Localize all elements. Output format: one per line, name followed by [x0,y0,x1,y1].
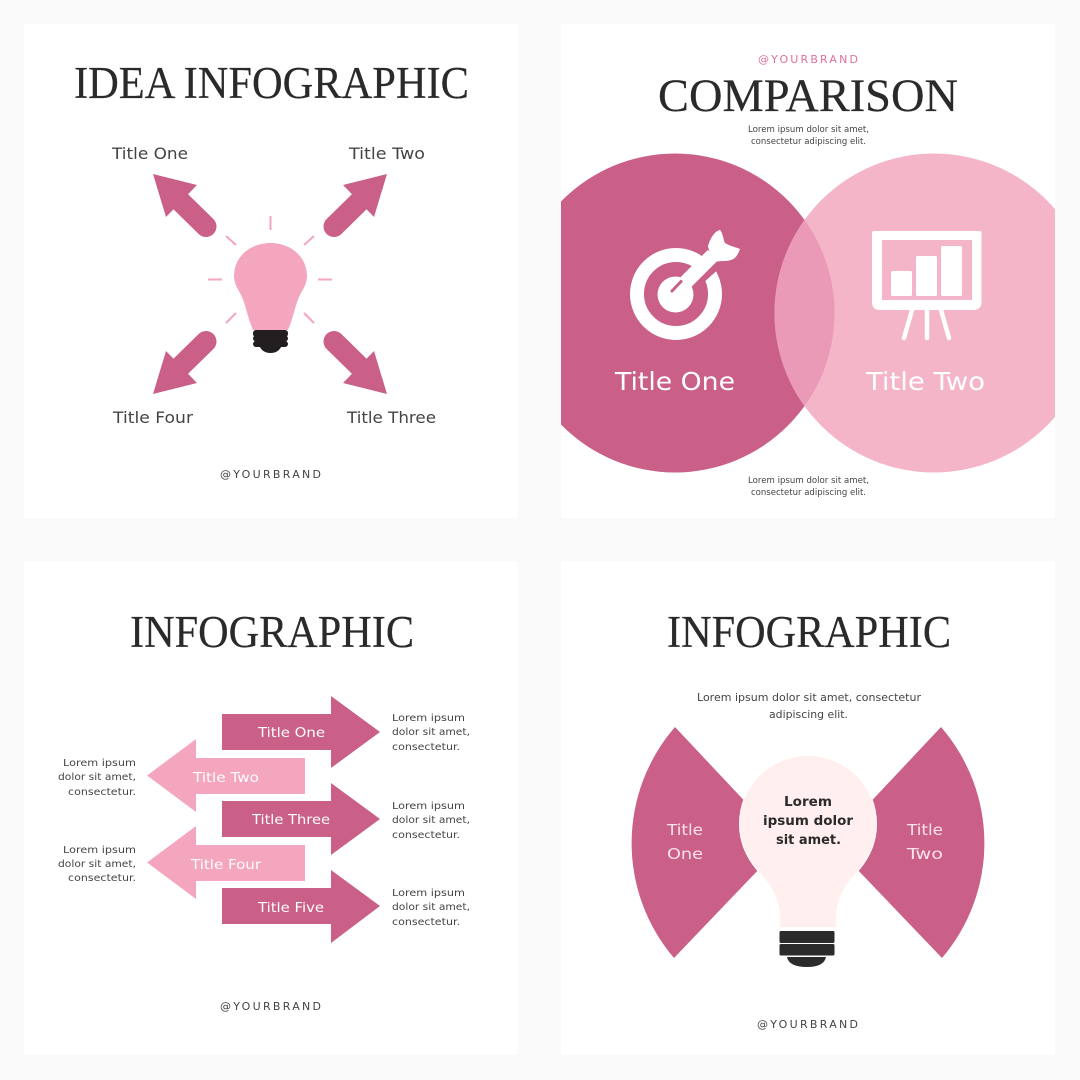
icon: light rays [208,216,332,323]
wing: title two: Title [906,821,943,839]
label: title four: Title Four [112,408,193,427]
venn diagram [561,154,1055,472]
panel: arrows infographic [24,561,518,1055]
text: right note one: Lorem ipsum [392,713,465,724]
text: left note four: dolor sit amet, [58,859,136,870]
arrow: title three [222,783,380,855]
label: title two: Title Two [348,144,425,163]
arrow: title four: Title Four [190,857,261,873]
text: right note five: Lorem ipsum [392,888,465,899]
arrow: title five: Title Five [257,900,324,916]
brand handle: @YOURBRAND [758,53,858,66]
text: left note four: consectetur. [68,873,136,884]
arrow: title five [222,870,380,943]
text: description: Lorem ipsum dolor sit amet, consectetur [697,692,922,704]
title: infographic: INFOGRAPHIC [667,607,951,657]
title: infographic: INFOGRAPHIC [130,607,414,657]
arrow: title three: Title Three [251,812,330,828]
text: top description: Lorem ipsum dolor sit amet, [748,125,869,135]
text: bulb caption: sit amet. [776,833,841,848]
text: bottom description: consectetur adipiscing elit. [751,488,866,498]
text: bulb caption [763,795,854,848]
text: right note five [392,888,470,928]
text: right note one: consectetur. [392,742,460,753]
title: comparison: COMPARISON [658,70,958,122]
arrow: up-right [334,174,387,226]
title: idea infographic: IDEA INFOGRAPHIC [74,58,469,108]
label: title two: Title Two [865,367,985,396]
text: bulb caption: Lorem [784,795,832,810]
text: right note one: dolor sit amet, [392,727,470,738]
wing: title one [632,727,784,958]
text: left note two [58,758,136,798]
text: top description: consectetur adipiscing elit. [751,137,866,147]
text: right note one [392,713,470,753]
brand handle: @YOURBRAND [220,468,321,481]
text: bulb caption: ipsum dolor [763,814,854,829]
text: left note four [58,845,136,884]
wing: title two: Two [906,845,943,863]
text: left note two: Lorem ipsum [63,758,136,769]
text: left note two: consectetur. [68,787,136,798]
brand handle: @YOURBRAND [757,1018,858,1031]
label: title one: Title One [614,367,735,396]
text: right note three: consectetur. [392,830,460,841]
icon: large bulb [740,756,876,967]
arrow: title one [222,696,380,768]
arrow: title one: Title One [257,725,325,741]
text: right note five: dolor sit amet, [392,902,470,913]
text: left note two: dolor sit amet, [58,772,136,783]
wing: title two [832,727,984,958]
icon: target with dart [637,230,740,333]
text: right note three [392,801,470,841]
text: bottom description: Lorem ipsum dolor sit amet, [748,476,869,486]
label: title one: Title One [111,144,188,163]
panel: comparison [561,55,1055,497]
label: title three: Title Three [346,408,436,427]
arrow: down-right [334,342,387,394]
text: top description [748,125,869,147]
arrow: title four [147,826,305,899]
arrow: up-left [153,174,206,226]
text: right note five: consectetur. [392,917,460,928]
text: right note three: dolor sit amet, [392,815,470,826]
text: bottom description [748,476,869,498]
brand handle: @YOURBRAND [220,1000,321,1013]
wing: title one: Title [666,821,703,839]
panel: idea infographic [24,24,518,518]
icon: light bulb [234,243,307,353]
icon: presentation board with bars [872,231,982,338]
panel: bulb infographic [561,561,1055,1055]
text: description: adipiscing elit. [769,709,848,721]
text: right note three: Lorem ipsum [392,801,465,812]
text: left note four: Lorem ipsum [63,845,136,856]
arrow: down-left [153,342,206,394]
arrow: title two [147,739,305,812]
text: description [697,692,922,721]
arrow: title two: Title Two [192,770,259,786]
wing: title one: One [667,845,703,863]
